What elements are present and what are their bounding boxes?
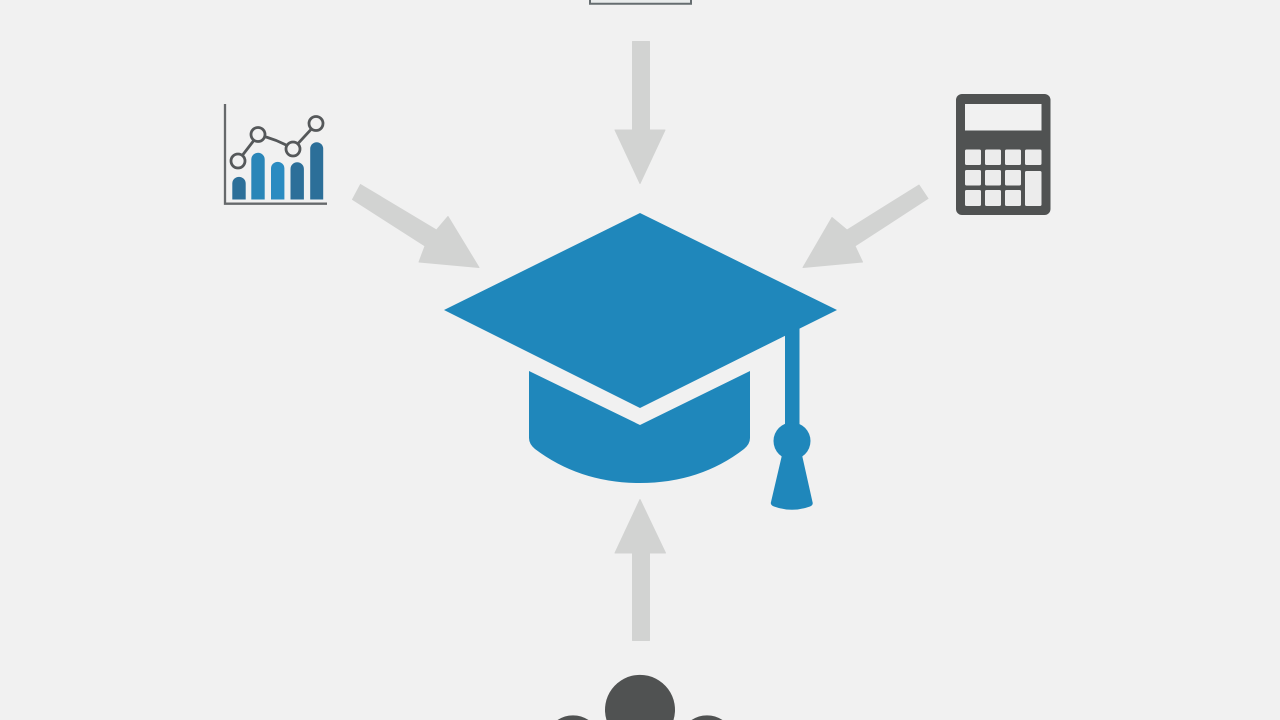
chart axes	[225, 104, 327, 204]
icon: document fragment at top	[590, 0, 691, 4]
cap top board	[444, 213, 837, 408]
arrow: top down	[615, 42, 665, 184]
calculator keys	[965, 150, 1042, 206]
icon: bar and line chart	[225, 104, 327, 204]
calculator display	[965, 104, 1042, 130]
cap base	[529, 371, 750, 483]
cap tassel	[771, 328, 813, 510]
arrow: bottom up	[615, 500, 666, 640]
icon: calculator	[956, 94, 1050, 215]
icon: graduation cap	[444, 213, 837, 510]
arrow: left diagonal	[352, 184, 479, 268]
chart bars	[232, 142, 323, 200]
chart trend line	[231, 116, 323, 168]
icon: people group, cropped at bottom	[558, 675, 722, 720]
arrow: right diagonal	[803, 185, 928, 268]
